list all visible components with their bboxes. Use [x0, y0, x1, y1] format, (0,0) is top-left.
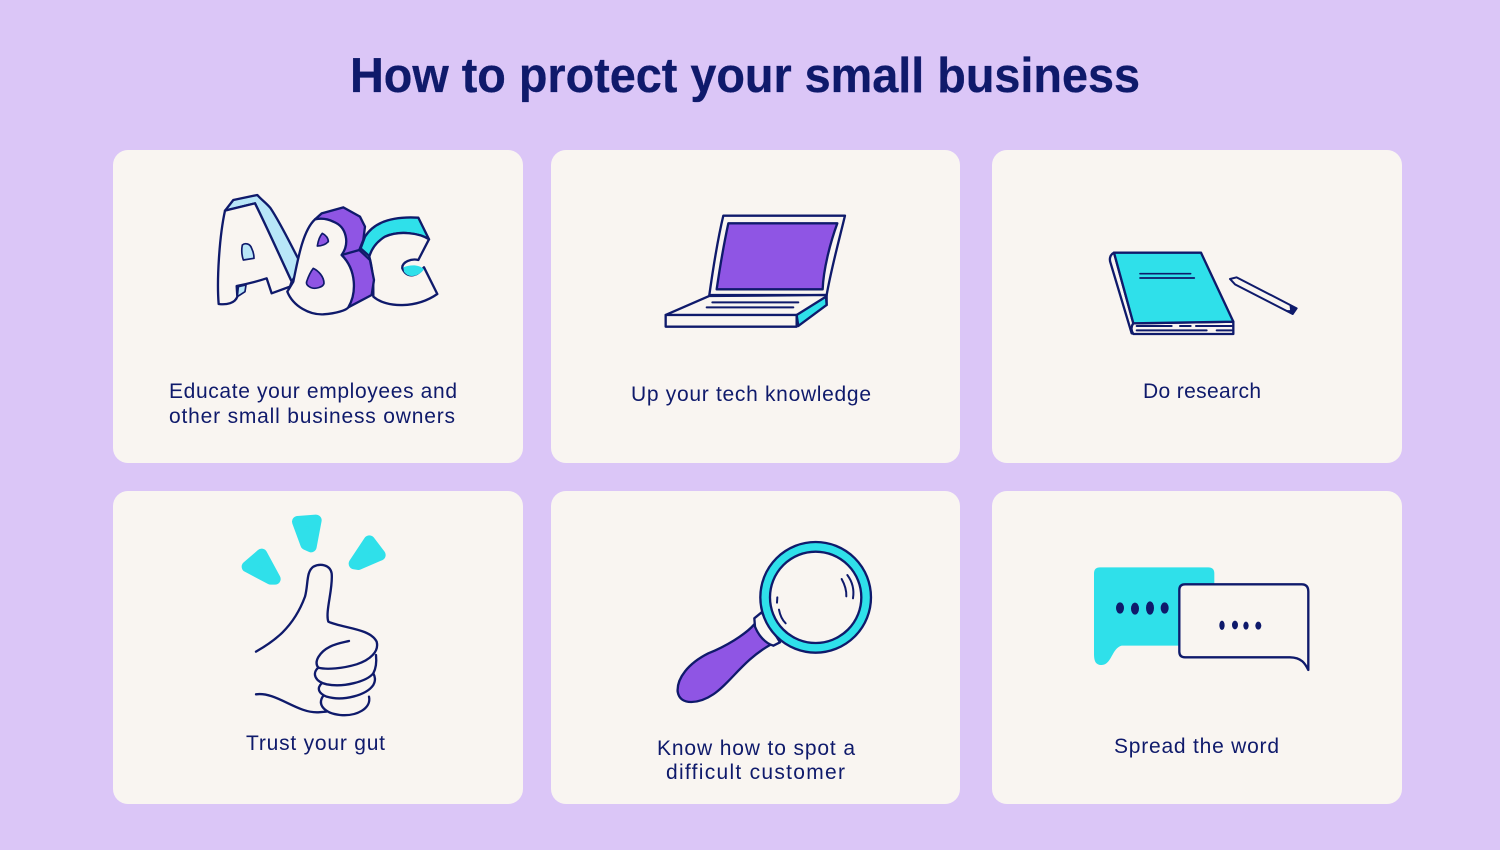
- text: tech caption: Up your tech knowledge: [631, 383, 871, 406]
- text: spread caption: Spread the word: [1114, 735, 1279, 758]
- panel: difficult customer: [551, 491, 960, 804]
- panel: educate: [113, 150, 523, 463]
- icon: laptop: [666, 216, 845, 327]
- text: trust caption: Trust your gut: [246, 732, 385, 755]
- panel: spread the word: [992, 491, 1402, 804]
- icon: magnifying glass: [678, 542, 871, 702]
- text: educate caption: other small business owners: [169, 405, 455, 428]
- icon: book and pencil: [1110, 253, 1297, 334]
- text: customer caption: Know how to spot a: [657, 737, 855, 760]
- title: How to protect your small business: [350, 49, 1140, 103]
- panel: tech knowledge: [551, 150, 960, 463]
- text: customer caption: [657, 737, 855, 784]
- icon: ABC letters: [218, 195, 437, 314]
- text: research caption: Do research: [1143, 380, 1261, 403]
- panel: trust your gut: [113, 491, 523, 804]
- icon: thumbs up: [247, 520, 380, 715]
- panel: research: [992, 150, 1402, 463]
- text: educate caption: Educate your employees and: [169, 380, 457, 403]
- icon: speech bubbles: [1094, 567, 1308, 670]
- text: customer caption: difficult customer: [666, 761, 845, 784]
- text: educate caption: [169, 380, 457, 428]
